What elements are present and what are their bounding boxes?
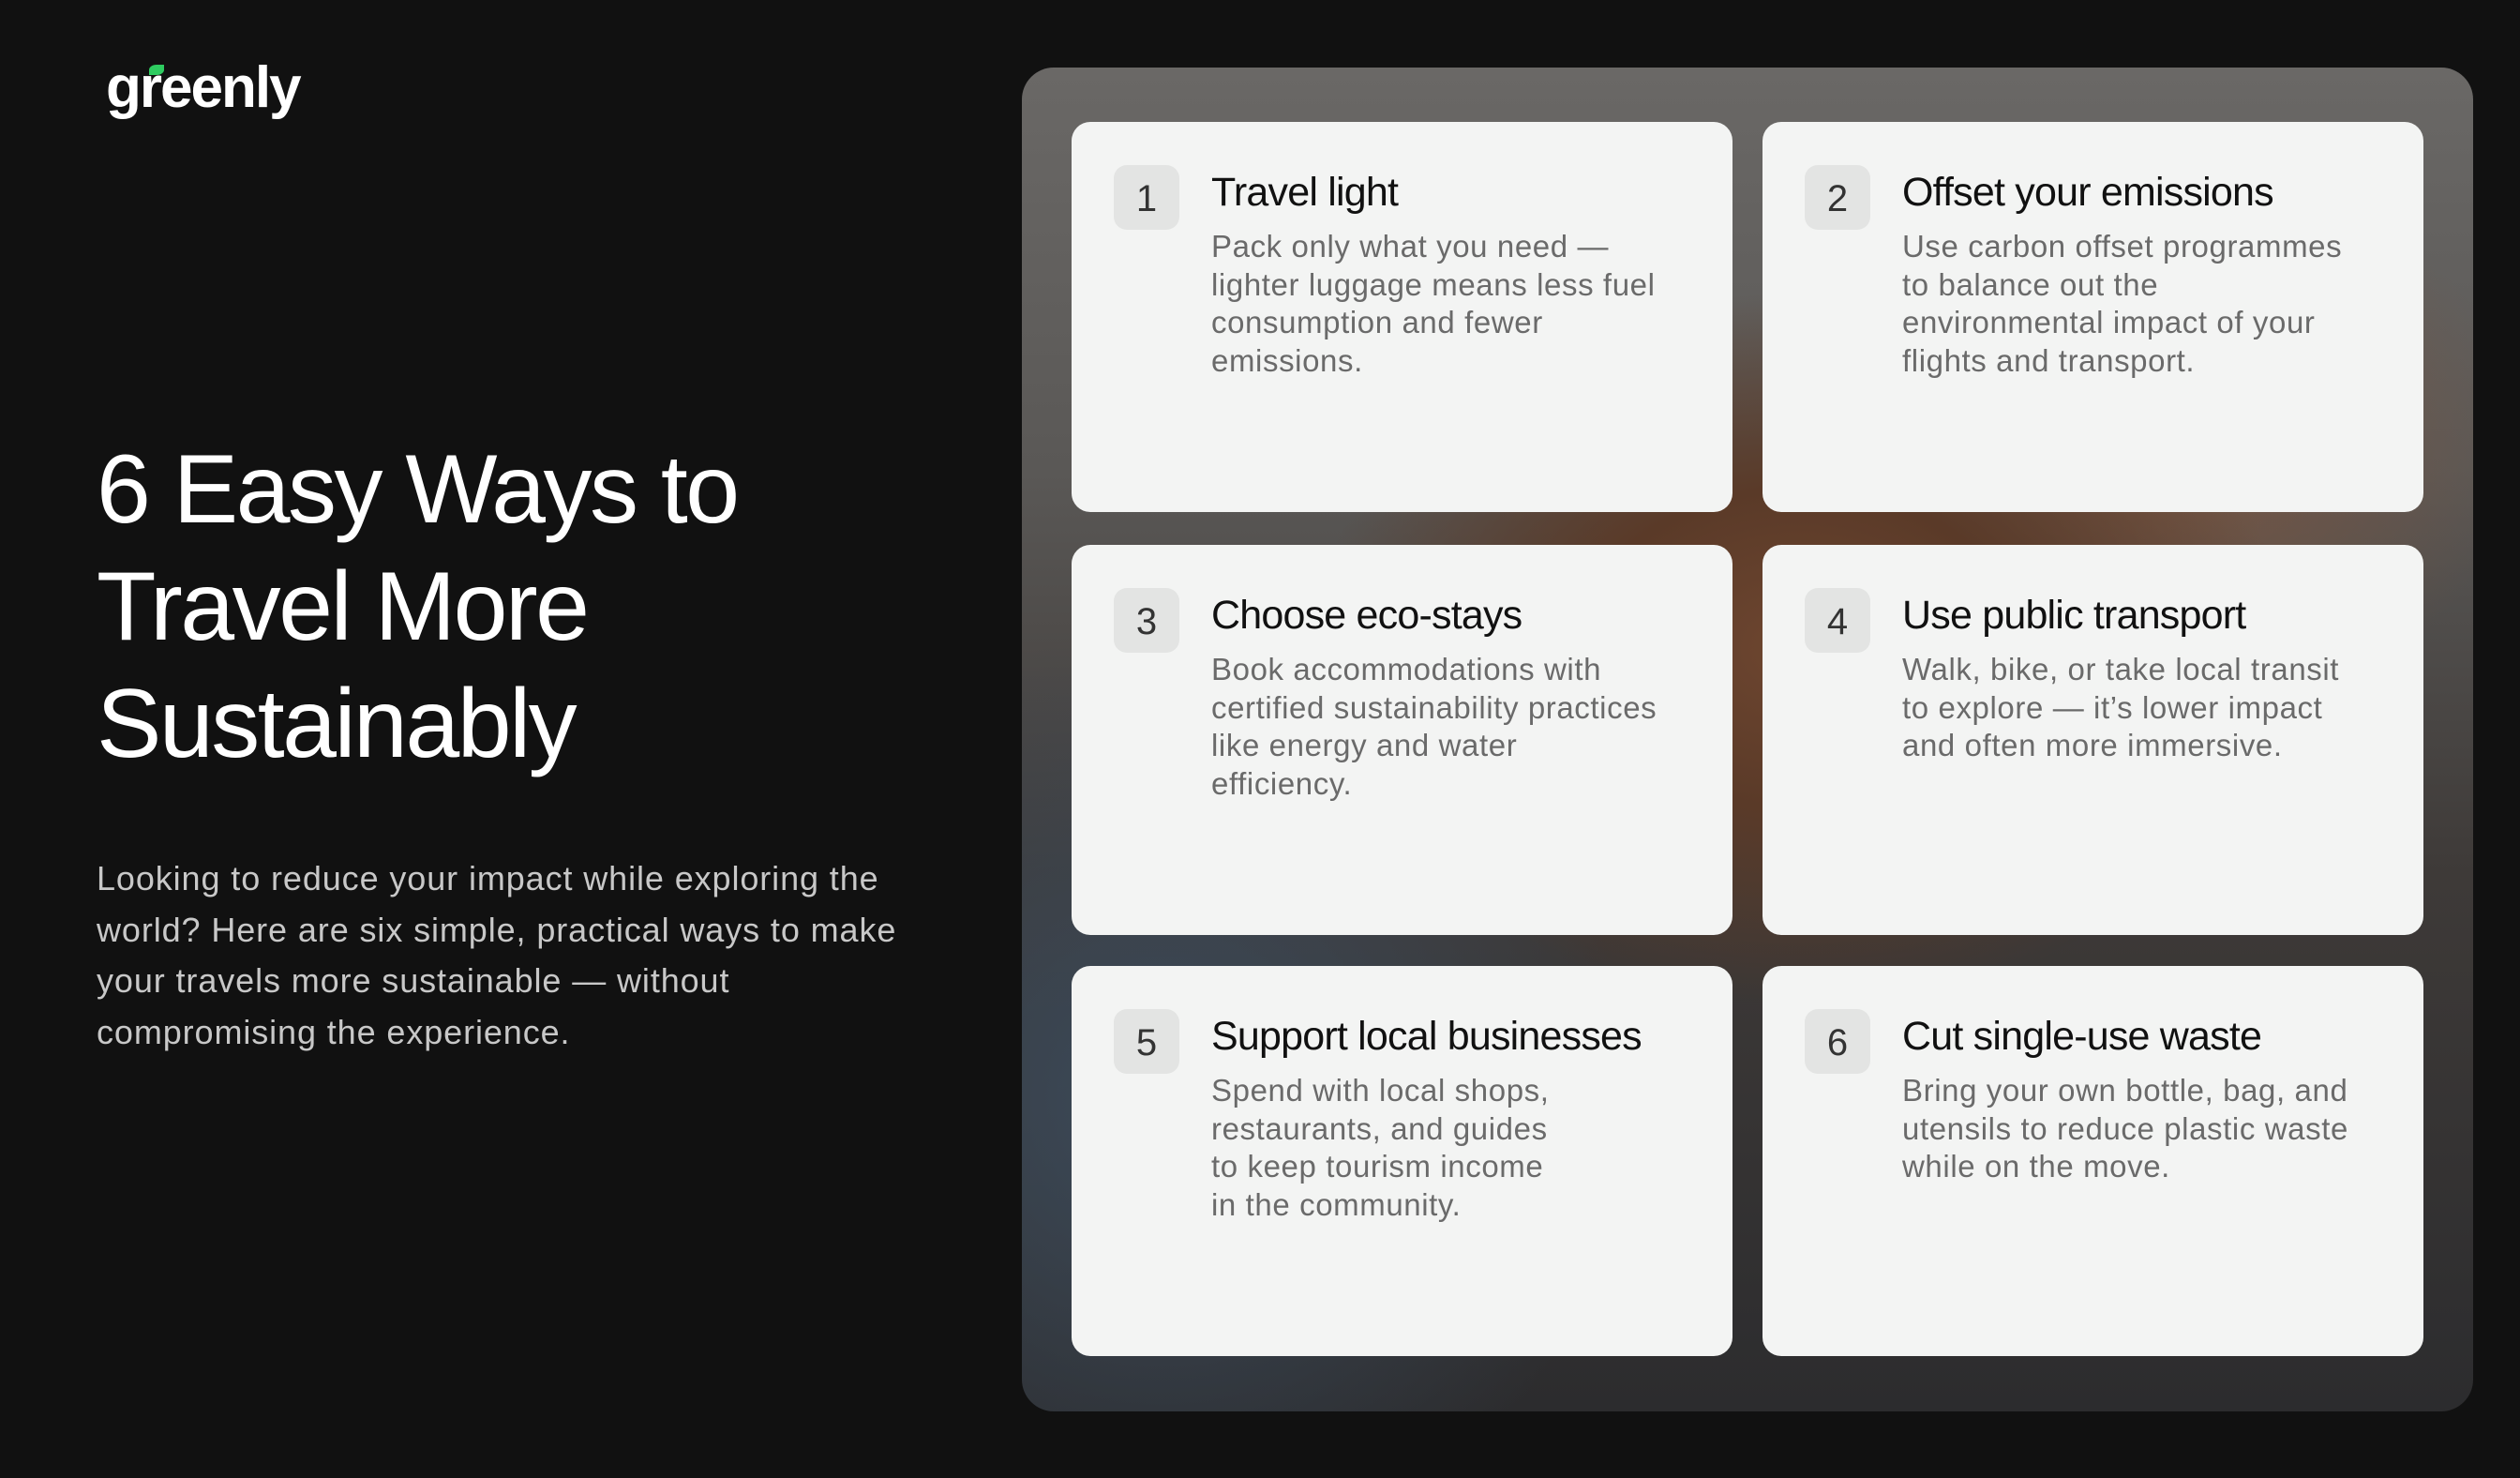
card 1: consumption and fewer (1211, 305, 1543, 339)
intro text: compromising the experience. (97, 1013, 570, 1050)
card 2 (1762, 122, 2423, 512)
card 6: Cut single-use waste (1902, 1014, 2261, 1059)
card 2: flights and transport. (1902, 343, 2195, 378)
card 3: Choose eco-stays (1211, 593, 1522, 638)
logo: greenly (106, 55, 300, 120)
card 3: efficiency. (1211, 766, 1352, 801)
card 2: 2 (1827, 178, 1848, 219)
panel: photo background with cards (1022, 68, 2473, 1411)
card 5 (1072, 966, 1732, 1356)
card 2: Use carbon offset programmes (1902, 229, 2342, 264)
card 6: Bring your own bottle, bag, and (1902, 1073, 2348, 1108)
card 3: Book accommodations with (1211, 652, 1601, 686)
card 5: to keep tourism income (1211, 1149, 1543, 1184)
card 4: and often more immersive. (1902, 728, 2283, 762)
card 1: Travel light (1211, 170, 1398, 215)
card 5: 5 (1136, 1022, 1157, 1063)
card 2: environmental impact of your (1902, 305, 2316, 339)
card 1: emissions. (1211, 343, 1363, 378)
card 5: Spend with local shops, (1211, 1073, 1550, 1108)
card 2: to balance out the (1902, 267, 2158, 302)
card 1: Pack only what you need — (1211, 229, 1609, 264)
card 1: lighter luggage means less fuel (1211, 267, 1656, 302)
card 4: to explore — it’s lower impact (1902, 690, 2322, 725)
card 2: Offset your emissions (1902, 170, 2273, 215)
card 5: restaurants, and guides (1211, 1111, 1548, 1146)
card 5: in the community. (1211, 1187, 1461, 1222)
card 4: Use public transport (1902, 593, 2245, 638)
title: 6 Easy Ways to (97, 435, 738, 544)
title: Sustainably (97, 670, 575, 778)
card 4 (1762, 545, 2423, 935)
card 6: utensils to reduce plastic waste (1902, 1111, 2348, 1146)
card 6: while on the move. (1902, 1149, 2170, 1184)
intro text (97, 859, 896, 1050)
intro text: Looking to reduce your impact while exploring the (97, 859, 879, 897)
card 1: 1 (1136, 178, 1157, 219)
card 3: certified sustainability practices (1211, 690, 1657, 725)
card 6: 6 (1827, 1022, 1848, 1063)
card 5: Support local businesses (1211, 1014, 1642, 1059)
title (97, 435, 738, 778)
card 4: Walk, bike, or take local transit (1902, 652, 2339, 686)
card 4: 4 (1827, 601, 1848, 642)
card 1 (1072, 122, 1732, 512)
card 3 (1072, 545, 1732, 935)
card 3: 3 (1136, 601, 1157, 642)
title: Travel More (97, 552, 587, 661)
intro text: your travels more sustainable — without (97, 961, 729, 1000)
intro text: world? Here are six simple, practical ways to make (97, 910, 896, 949)
card 3: like energy and water (1211, 728, 1517, 762)
card 6 (1762, 966, 2423, 1356)
